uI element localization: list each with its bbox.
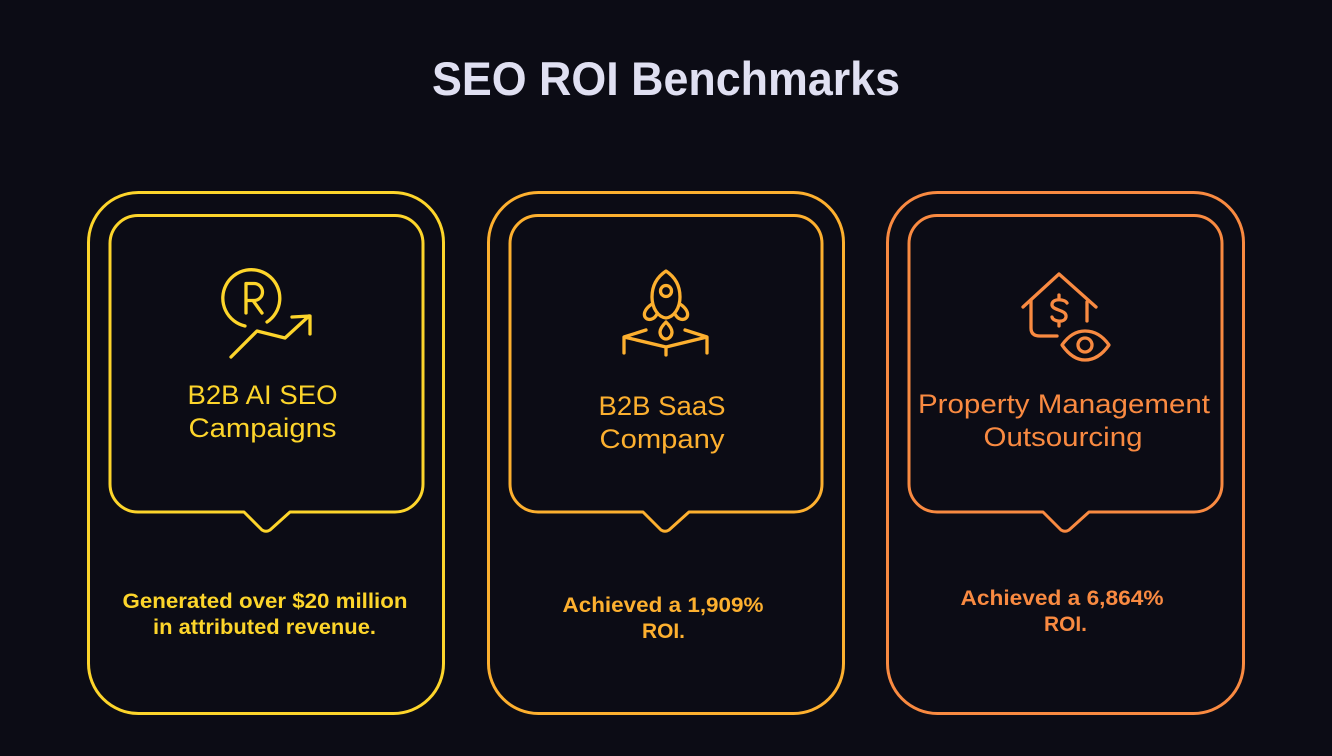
description [122, 589, 408, 639]
heading [918, 389, 1211, 452]
description: Achieved a 1,909% [562, 593, 764, 617]
inner speech bubble [510, 216, 822, 531]
description: in attributed revenue. [153, 615, 376, 639]
description [562, 593, 764, 643]
outer card [888, 192, 1244, 714]
title: SEO ROI Benchmarks [432, 52, 900, 105]
description: Achieved a 6,864% [960, 586, 1164, 610]
heading: Outsourcing [984, 422, 1142, 452]
inner speech bubble [110, 216, 423, 531]
heading: B2B AI SEO [188, 380, 338, 410]
description: ROI. [1044, 612, 1087, 636]
description: ROI. [642, 619, 685, 643]
heading: Company [600, 424, 725, 454]
inner speech bubble [909, 216, 1222, 531]
panel: Property Management Outsourcing [888, 192, 1244, 714]
heading: Property Management [918, 389, 1211, 419]
panel: B2B SaaS Company [488, 192, 844, 714]
icon: house with dollar and eye [1023, 274, 1109, 360]
heading: B2B SaaS [598, 391, 726, 421]
heading: Campaigns [188, 413, 336, 443]
outer card [88, 192, 444, 714]
heading [188, 380, 338, 443]
description [960, 586, 1164, 636]
panel: B2B AI SEO Campaigns [88, 192, 444, 714]
icon: registered trademark with rising arrow [223, 270, 310, 357]
description: Generated over $20 million [122, 589, 408, 613]
heading [598, 391, 726, 454]
icon: rocket launching from platform [624, 271, 707, 355]
outer card [488, 192, 844, 714]
